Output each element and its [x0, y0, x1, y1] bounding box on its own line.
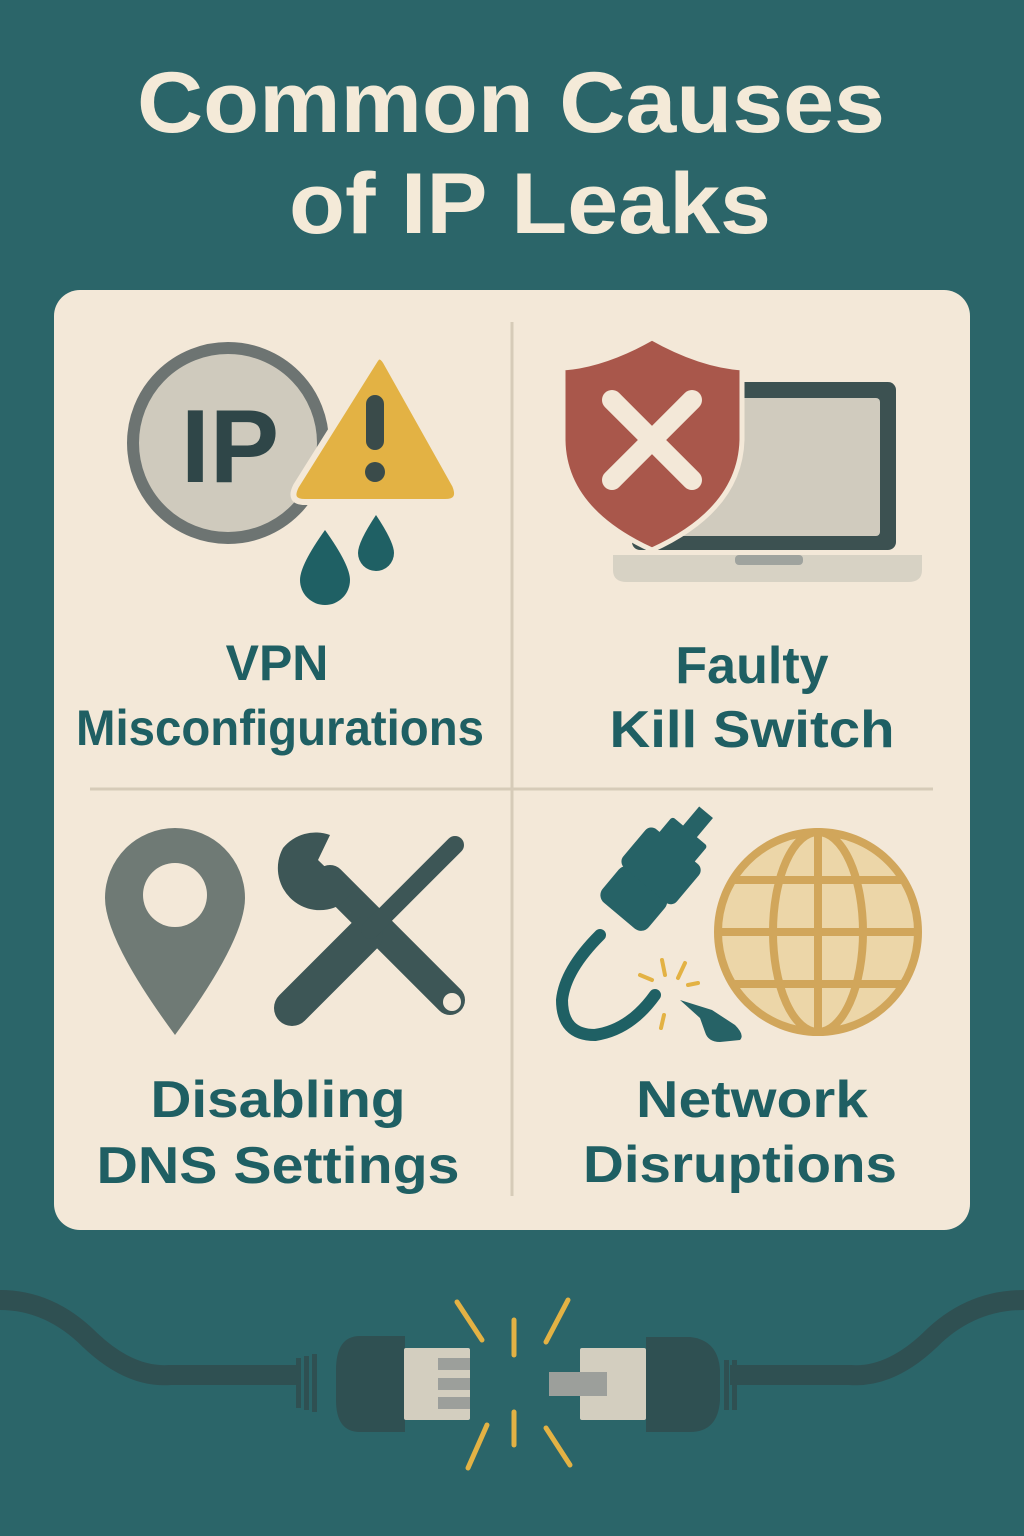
label: VPN Misconfigurations [76, 635, 484, 756]
illustration: disconnected plugs [0, 1300, 1024, 1468]
icon: IP warning leak: IP [181, 389, 279, 505]
icon: IP warning leak [133, 348, 457, 605]
panel: causes card [54, 290, 970, 1230]
icon: map pin and tools [105, 828, 461, 1035]
label: VPN Misconfigurations: Misconfigurations [76, 700, 484, 756]
icon: unplugged cable and globe [562, 790, 918, 1042]
label: VPN Misconfigurations: VPN [226, 635, 328, 691]
title: of IP Leaks [289, 156, 771, 252]
label: Network Disruptions: Network [636, 1071, 868, 1129]
label: Disabling DNS Settings: Disabling [150, 1071, 406, 1129]
label: Faulty Kill Switch: Kill Switch [610, 701, 894, 759]
icon: shield and laptop [563, 338, 922, 582]
label: Disabling DNS Settings [96, 1071, 460, 1195]
title [137, 55, 885, 252]
label: Faulty Kill Switch [610, 637, 894, 759]
label: Faulty Kill Switch: Faulty [675, 637, 829, 695]
label: Network Disruptions: Disruptions [583, 1136, 897, 1194]
label: Disabling DNS Settings: DNS Settings [96, 1137, 460, 1195]
label: Network Disruptions [583, 1071, 897, 1194]
title: Common Causes [137, 55, 885, 151]
